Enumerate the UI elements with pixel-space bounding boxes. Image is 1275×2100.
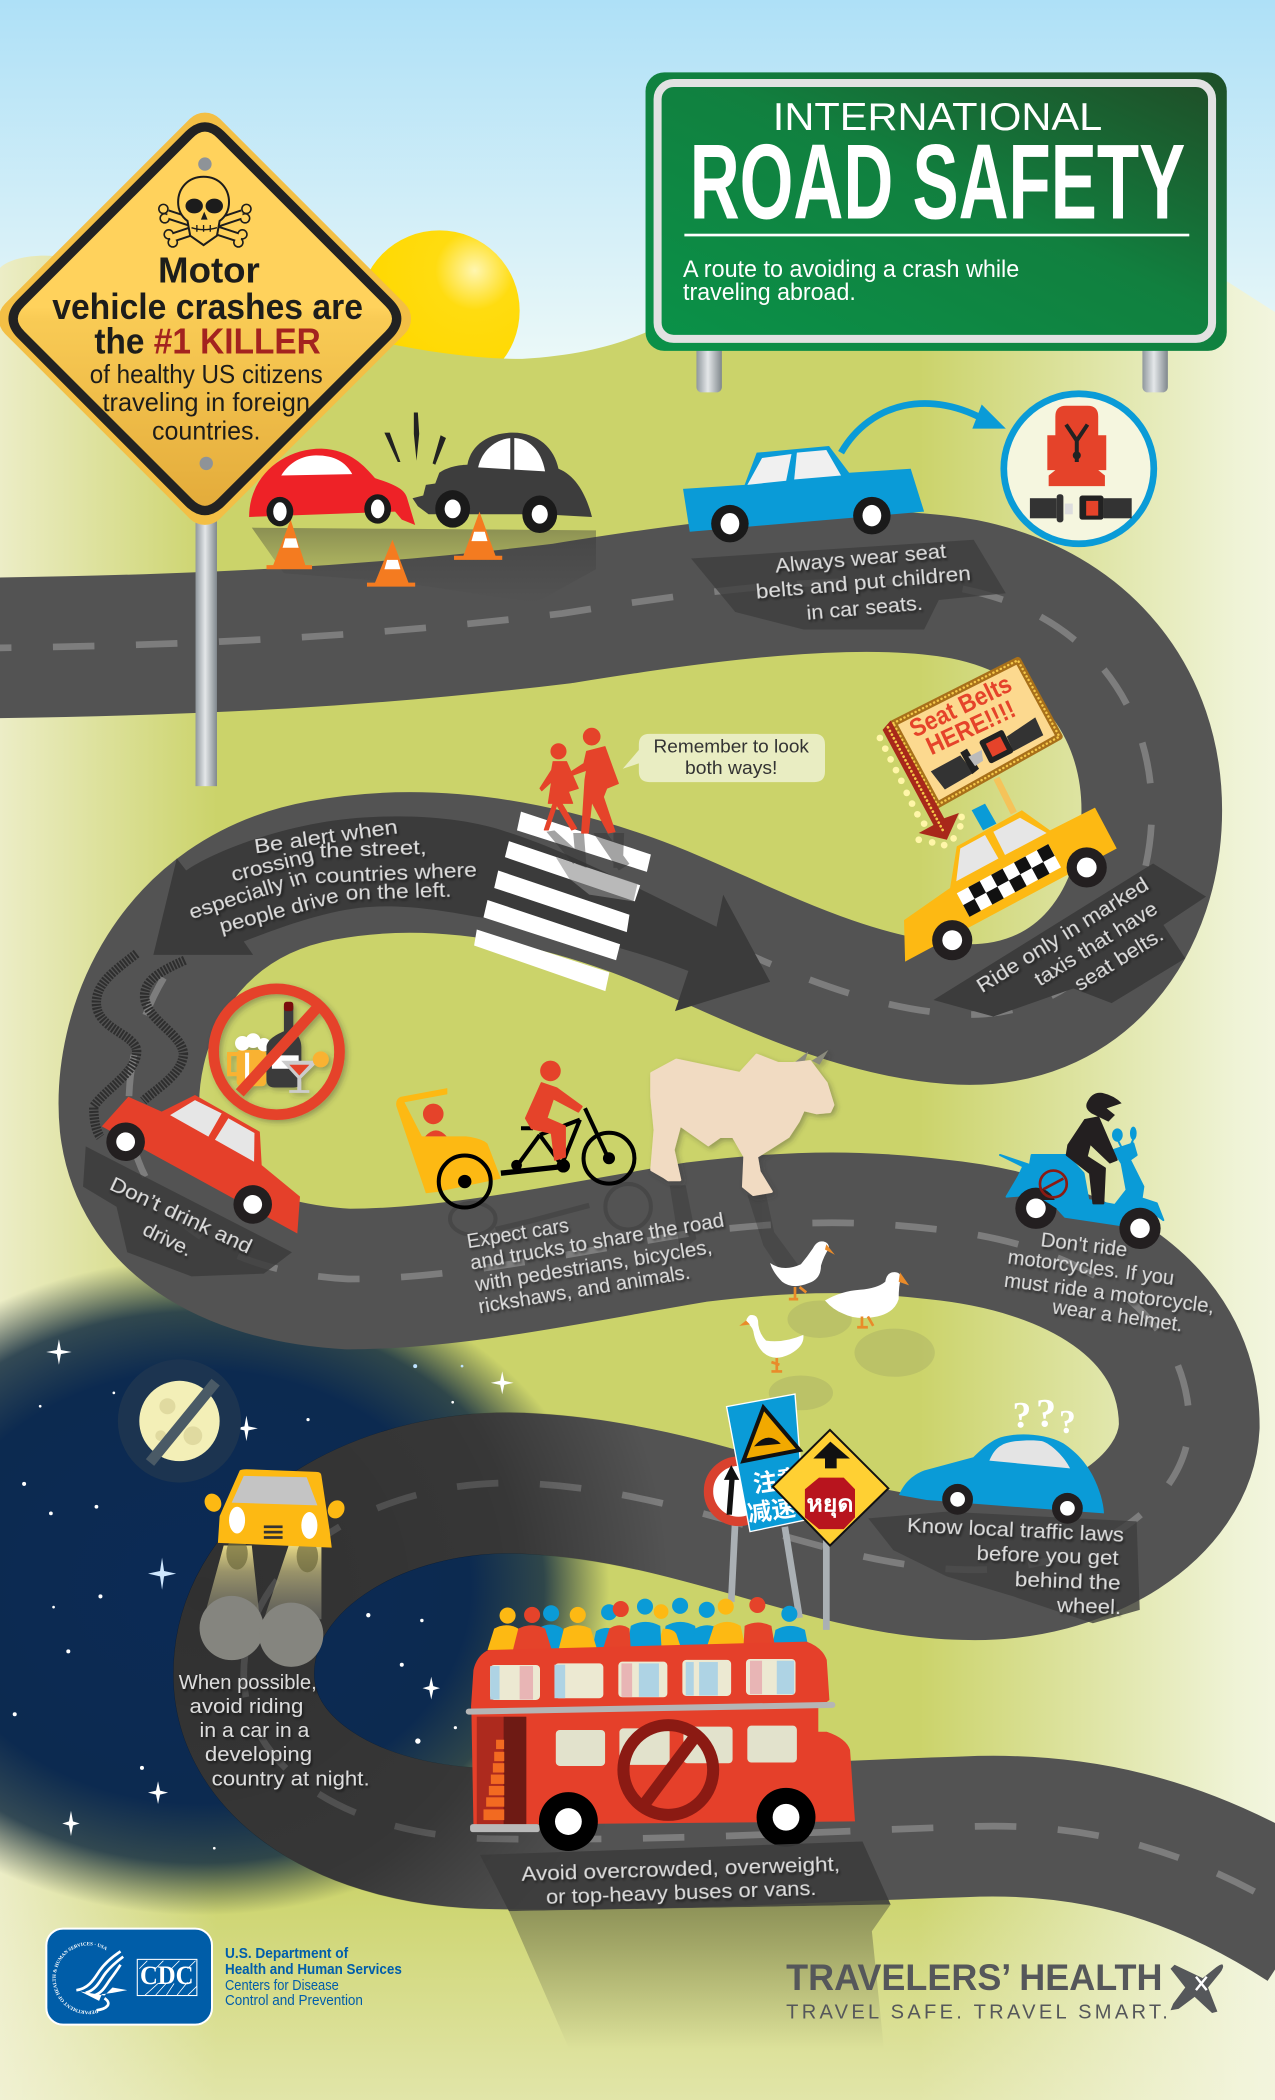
caption: motorcycles: motorcycles. If you <box>1007 1246 1176 1290</box>
taxi checker stripe <box>957 844 1061 917</box>
diamond sign text: Motor <box>158 250 260 291</box>
question marks: ? <box>1012 1396 1031 1437</box>
blue car <box>683 446 924 542</box>
vehicle and cow reflections on road <box>450 1184 804 1286</box>
car crash scene <box>249 412 596 603</box>
caption: be alert <box>186 815 477 938</box>
diamond sign text: the #1 KILLER <box>94 321 321 362</box>
highway title sign <box>646 72 1227 392</box>
arrow to car seat <box>841 403 1006 453</box>
icon: skull and crossbones <box>158 177 252 248</box>
title text: traveling abroad. <box>683 279 856 306</box>
diamond sign text <box>52 250 363 445</box>
caption box: local traffic laws <box>868 1512 1140 1623</box>
caption: local traffic laws: behind the <box>1014 1568 1121 1595</box>
CDC logo block <box>45 1928 213 2026</box>
leg shadows <box>546 830 629 871</box>
caption: seat belts: Always wear seat <box>774 540 947 578</box>
taxi <box>904 804 1117 962</box>
caption: marked taxis: Ride only in marked <box>972 873 1153 998</box>
HHS and CDC text: U.S. Department of <box>225 1946 348 1962</box>
bus body <box>471 1642 855 1825</box>
caption: be alert: especially in <box>186 865 310 924</box>
winding road <box>0 582 1275 1922</box>
CDC mark: CDC <box>140 1960 194 1990</box>
speech bubble <box>623 734 825 782</box>
moon crossed out <box>118 1359 241 1483</box>
title text: INTERNATIONAL <box>773 96 1102 139</box>
HHS and CDC text: Control and Prevention <box>225 1993 363 2009</box>
caption: be alert: people drive <box>217 884 341 938</box>
caption: be alert: countries where <box>314 859 477 888</box>
caption: local traffic laws: Know local traffic laws <box>907 1514 1124 1547</box>
caption: avoid night riding: When possible, <box>179 1671 317 1694</box>
HHS and CDC text: Centers for Disease <box>225 1978 339 1994</box>
sky background <box>0 0 1275 402</box>
sign arrow <box>883 721 959 840</box>
question marks: ? <box>1036 1390 1056 1435</box>
caption: motorcycles: must ride a motorcycle, <box>1003 1269 1216 1318</box>
caption: marked taxis <box>933 863 1206 1017</box>
speech bubble: Remember to look <box>654 736 810 757</box>
caption: be alert: on the left. <box>345 879 452 905</box>
caption: local traffic laws: before you get <box>976 1542 1119 1570</box>
HHS eagle <box>76 1951 127 2010</box>
icon: airplane <box>1171 1964 1223 2013</box>
big arrow painted on road <box>153 816 770 1011</box>
foreign road signs: 减速 <box>746 1495 797 1528</box>
caption: local traffic laws <box>907 1514 1124 1619</box>
prohibition symbol <box>623 1725 713 1815</box>
title text: A route to avoiding a crash while <box>683 256 1019 283</box>
caption: avoid overcrowded <box>480 1842 891 1911</box>
caption: motorcycles <box>1003 1228 1216 1336</box>
question marks <box>1012 1390 1076 1441</box>
caption: be alert: the street, <box>319 836 427 863</box>
night car with headlights <box>200 1469 348 1667</box>
caption: expect cars: with pedestrians, bicycles, <box>472 1235 714 1297</box>
seat belts billboard with arrow: Seat Belts <box>905 670 1016 743</box>
title text <box>683 96 1189 306</box>
rickshaw and cyclist <box>396 1061 634 1208</box>
tilted red car <box>102 1095 300 1233</box>
seat belts billboard with arrow <box>877 660 1059 848</box>
caption: local traffic laws: wheel. <box>1055 1594 1122 1619</box>
goose shadows <box>769 1300 935 1410</box>
sign light bulbs <box>877 735 965 848</box>
HHS seal ring text: DEPARTMENT OF HEALTH & HUMAN SERVICES · USA <box>52 1942 106 2014</box>
stars <box>13 1338 514 1850</box>
icon: no alcohol sign <box>214 989 340 1115</box>
Travelers' Health logo text: TRAVEL SAFE. TRAVEL SMART. <box>786 2001 1168 2023</box>
sun <box>359 230 520 391</box>
question marks: ? <box>1059 1404 1076 1441</box>
diamond sign text: vehicle crashes are <box>52 286 363 327</box>
caption: don't drink and drive: Don’t drink and <box>106 1173 256 1259</box>
caption: marked taxis: taxis that have <box>1030 897 1162 991</box>
caption: don't drink and drive: drive. <box>139 1218 196 1261</box>
diamond sign text: traveling in foreign <box>102 389 310 417</box>
speech bubble: both ways! <box>685 757 777 778</box>
caption: expect cars: rickshaws, and animals. <box>477 1261 692 1318</box>
red car <box>249 449 415 525</box>
caption: motorcycles: wear a helmet. <box>1050 1295 1184 1336</box>
HHS and CDC text: Health and Human Services <box>225 1962 402 1978</box>
scooter with rider <box>1000 1093 1163 1249</box>
traffic cones <box>267 520 415 587</box>
caption: be alert: Be alert when <box>253 815 399 858</box>
bus wheels <box>470 1824 540 1832</box>
pedestrian reflection on crosswalk <box>556 857 638 901</box>
night sky <box>0 1259 609 1915</box>
bus upper windows <box>490 1659 796 1700</box>
passengers on roof <box>488 1597 809 1650</box>
cow <box>652 1050 833 1195</box>
Travelers' Health logo text: TRAVELERS’ HEALTH <box>786 1956 1162 1998</box>
caption: expect cars: Expect cars <box>465 1214 571 1253</box>
foreign road signs: 注意 <box>751 1464 803 1499</box>
caption: marked taxis: seat belts. <box>1070 923 1168 996</box>
caption: seat belts: belts and put children <box>755 562 972 604</box>
crosswalk stripes <box>474 812 651 991</box>
overcrowded double decker bus <box>469 1597 891 2049</box>
black car <box>412 433 592 517</box>
caption: avoid overcrowded: Avoid overcrowded, overweight, <box>521 1853 840 1886</box>
caption: avoid night riding <box>179 1671 370 1790</box>
foreign road signs <box>708 1394 888 1630</box>
foreign road signs: หยุด <box>807 1490 853 1518</box>
pedestrians <box>540 728 629 871</box>
bus door and stairs <box>477 1717 526 1825</box>
caption: avoid night riding: country at night. <box>212 1767 370 1790</box>
bus lower windows <box>556 1726 797 1766</box>
HHS and CDC text <box>225 1946 402 2009</box>
diamond sign text: of healthy US citizens <box>90 361 323 389</box>
caption: expect cars: and trucks to share the road <box>468 1209 726 1275</box>
diamond sign text: countries. <box>152 417 260 445</box>
Travelers' Health logo text <box>786 1956 1168 2023</box>
caption: avoid night riding: avoid riding <box>190 1695 303 1718</box>
caption: expect cars <box>465 1209 726 1318</box>
warning diamond sign with pole <box>0 104 420 786</box>
impact marks <box>384 412 446 465</box>
sign post <box>996 778 1014 813</box>
caption: don't drink and drive <box>83 1146 292 1276</box>
caption: seat belts <box>691 540 1006 629</box>
icon: car seat and seat belt in circle <box>1004 394 1154 544</box>
geese <box>739 1241 935 1410</box>
caption: seat belts: in car seats. <box>806 592 924 625</box>
caption: avoid overcrowded: or top-heavy buses or vans. <box>546 1877 817 1909</box>
caption: motorcycles: Don't ride <box>1039 1228 1129 1262</box>
skid marks <box>94 954 185 1137</box>
caption: avoid night riding: in a car in a <box>200 1719 310 1742</box>
caption: avoid night riding: developing <box>205 1743 312 1766</box>
seat belts billboard with arrow: HERE!!!! <box>922 695 1020 761</box>
confused blue car <box>899 1390 1104 1524</box>
caption: be alert: crossing <box>229 844 316 886</box>
